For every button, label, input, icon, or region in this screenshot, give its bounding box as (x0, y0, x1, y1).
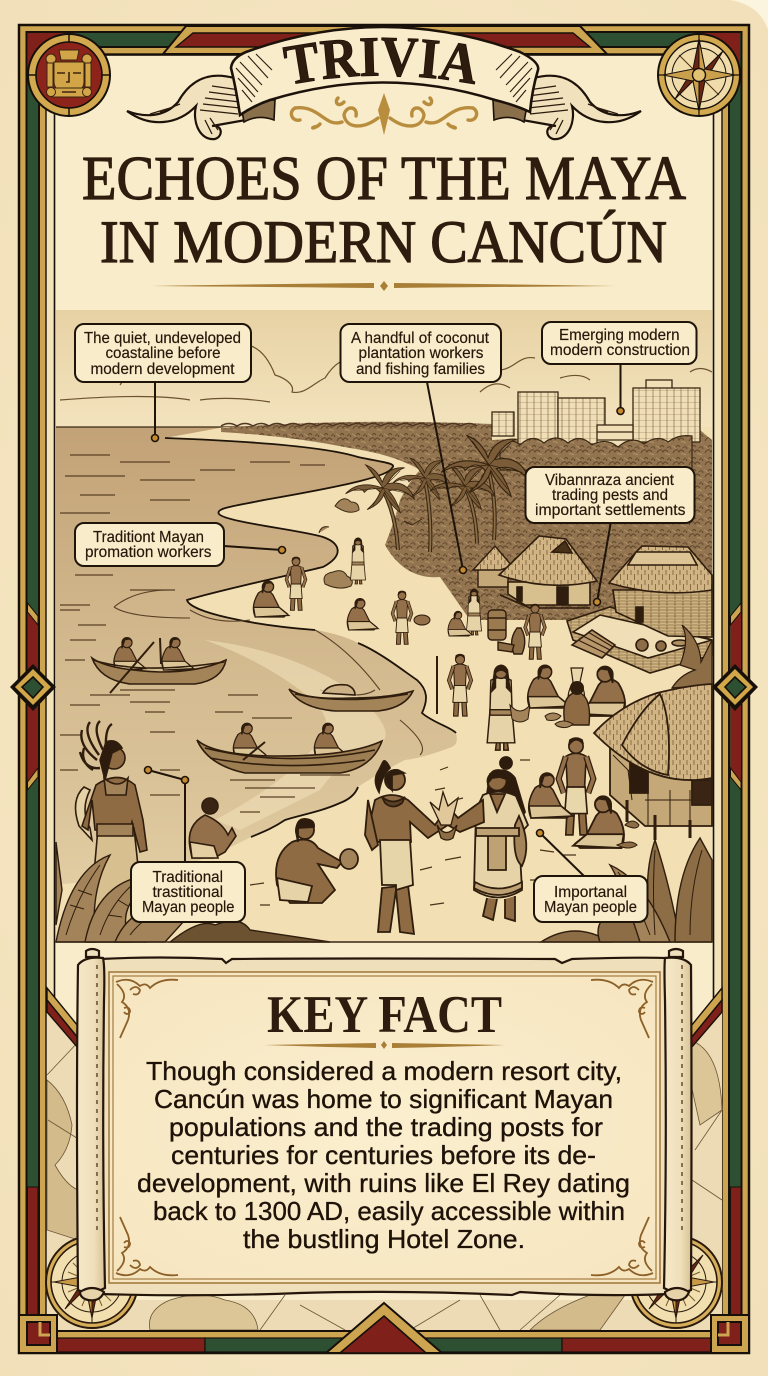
title divider (152, 281, 615, 291)
callout: modern construction: Emerging modern (559, 327, 680, 344)
traded plant basket (430, 792, 458, 840)
parchment sheet (100, 958, 668, 1295)
boat 3 (197, 723, 382, 773)
main title: IN MODERN CANCÚN (100, 209, 667, 275)
emblem: Mayan mask seal (28, 34, 110, 116)
diagonal corner stripes (47, 988, 722, 1048)
folds (240, 100, 528, 122)
clouds (60, 346, 712, 402)
main title: ECHOES OF THE MAYA (82, 145, 686, 213)
boats (92, 638, 413, 773)
boat 2 (289, 685, 413, 711)
bottom right compass (630, 1236, 722, 1328)
key fact body text: development, with ruins like El Rey dating (137, 1168, 630, 1198)
callout: ancient trading posts: Vibannraza ancient (545, 472, 675, 489)
callout: modern construction: modern construction (550, 342, 690, 359)
key fact scroll (77, 949, 692, 1300)
inner panel (109, 972, 660, 1283)
corner square right (711, 1315, 749, 1353)
bottom frame band (19, 1303, 749, 1353)
mid beach villagers (437, 654, 530, 750)
callout: plantation workers: promation workers (85, 544, 212, 561)
map panel background (47, 1000, 722, 1331)
callout: coconut workers: A handful of coconut (351, 330, 490, 347)
upper beach villagers (253, 538, 545, 659)
standing man exchanging (365, 761, 448, 934)
trivia heading (282, 37, 476, 84)
corner band red top right (698, 33, 740, 70)
left ribbon tail (127, 76, 246, 139)
feathered Mayan man (75, 721, 147, 942)
left scroll roller (77, 949, 105, 1300)
callout: traditional Mayan people: Traditional (152, 869, 223, 886)
lower left red band (28, 1187, 38, 1315)
key fact body text: back to 1300 AD, easily accessible within (153, 1196, 625, 1226)
callout: ancient trading posts: trading pests and (552, 487, 668, 504)
key fact body text: populations and the trading posts for (169, 1112, 603, 1142)
bottom triangle (326, 1303, 442, 1353)
key fact body text: centuries for centuries before its de- (171, 1140, 596, 1170)
lower right red band (730, 1187, 741, 1315)
illustration panel (56, 310, 712, 942)
woman exchanging (446, 757, 528, 921)
agave beside temple (672, 625, 712, 688)
small thatched hut (473, 546, 512, 587)
foreground foliage left (56, 842, 330, 942)
villagers by hut (529, 738, 639, 848)
right diamond (712, 664, 758, 711)
corner scrollwork (116, 980, 653, 1275)
seated man by water (189, 798, 236, 858)
callout: coconut workers (340, 324, 501, 574)
boat 1 (92, 638, 226, 693)
callout: plantation workers (75, 523, 286, 566)
palm trees (346, 436, 529, 552)
callout: coconut workers: and fishing families (356, 361, 485, 378)
key fact body text: Cancún was home to significant Mayan (154, 1084, 613, 1114)
callout: important Mayan people: Mayan people (544, 899, 637, 916)
callout: important Mayan people: Importanal (554, 884, 627, 901)
callout: ancient trading posts: important settlements (535, 502, 686, 519)
crouching man with jar (276, 819, 358, 903)
callout: coconut workers: plantation workers (358, 345, 484, 362)
seated traders group (528, 665, 625, 728)
left diamond (10, 664, 56, 711)
key fact body text: Though considered a modern resort city, (146, 1056, 622, 1086)
callout: quiet coastline: The quiet, undeveloped (84, 330, 241, 347)
jungle (221, 422, 712, 620)
sea (56, 427, 712, 942)
trivia heading: TRIVIA (282, 37, 476, 84)
banner ribbon (127, 27, 641, 139)
top red trapezoid (163, 26, 607, 54)
callout: traditional Mayan people: Mayan people (142, 899, 235, 916)
foreground thatched hut (594, 684, 712, 840)
right scroll roller (664, 949, 692, 1300)
callout: ancient trading posts (526, 467, 694, 606)
callout: plantation workers: Traditiont Mayan (93, 529, 204, 546)
right ribbon tail (522, 76, 641, 139)
corner band red top left (28, 33, 70, 70)
footprints on sand (250, 760, 576, 905)
callout: quiet coastline (75, 324, 251, 442)
water ripples (60, 455, 350, 812)
gold flourish ornament (291, 93, 477, 135)
barrel and jars (488, 610, 525, 654)
callout: traditional Mayan people: trastitional (152, 884, 223, 901)
main ribbon (231, 27, 538, 115)
emblem: compass rose top right (658, 34, 740, 116)
thatched hut with door (499, 536, 597, 608)
callout: quiet coastline: modern development (90, 361, 235, 378)
callout: quiet coastline: coastaline before (106, 345, 221, 362)
key fact divider (264, 1041, 505, 1049)
sky (56, 310, 712, 428)
bottom left compass (46, 1236, 138, 1328)
key fact body text (137, 1056, 630, 1254)
callout: modern construction (542, 322, 696, 414)
left band red section (28, 603, 38, 790)
main title (82, 145, 686, 275)
key fact heading: KEY FACT (267, 986, 502, 1044)
shrubs on beach (319, 499, 359, 588)
callout: traditional Mayan people (131, 766, 245, 922)
callout: important Mayan people (534, 830, 648, 922)
foreground foliage right (541, 838, 712, 942)
modern hotel buildings (492, 380, 700, 451)
beach (56, 427, 712, 942)
key fact body text: the bustling Hotel Zone. (243, 1224, 525, 1254)
corner square left (19, 1315, 57, 1353)
right band red section (730, 603, 741, 790)
stepped stone temple (567, 546, 712, 673)
